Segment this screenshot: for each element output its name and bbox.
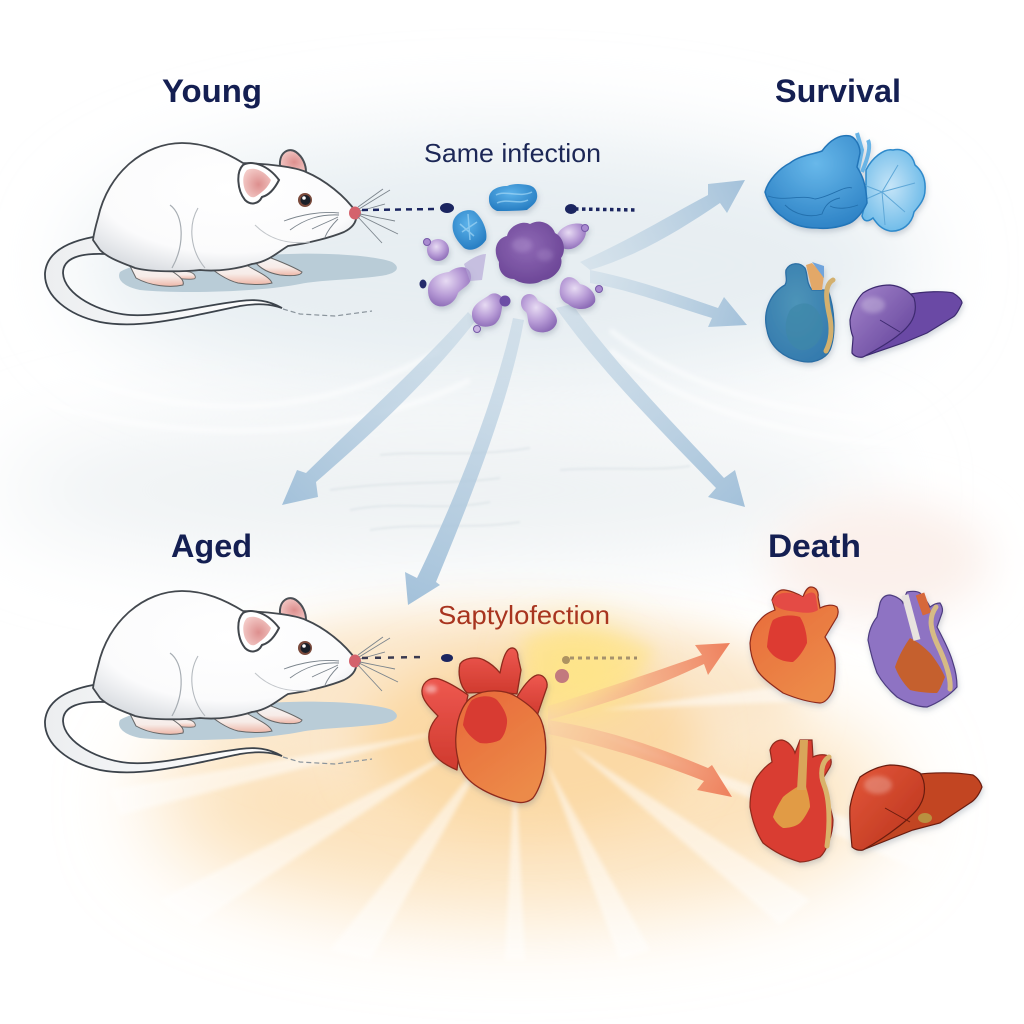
organ: red liver [850,765,982,850]
vessels [857,133,869,172]
organ: red heart upper [750,587,838,703]
purple pathogen: left small [424,238,449,261]
title: Survival: Survival [775,73,901,109]
label: Same infection: Same infection [424,138,601,168]
title: Death: Death [768,528,861,564]
dot: aged left [441,654,453,662]
blue pathogen: oval [489,184,537,211]
main body [765,136,867,228]
organ: red heart lower [750,740,833,862]
heart: left lobe [422,678,468,770]
heart: right vessel [517,675,547,716]
pathogen cluster [420,184,602,332]
dot: young right [565,204,577,214]
title: Young: Young [162,73,262,109]
purple pathogen: lower middle [472,293,510,332]
dotted path: young left [362,209,438,210]
heart: ventricle [456,691,546,803]
dotted path: young right [575,209,638,210]
organ: purple liver [850,285,962,357]
dark dot [420,280,426,288]
arrow: to aged mouse [282,312,476,505]
translucent pathogen fragment [464,254,486,281]
vessels [806,263,824,290]
arrow: to death heart upper [548,643,730,720]
heart: red patch [463,696,507,743]
arrow: to death organs lower [548,720,732,797]
aged central heart [422,648,547,803]
purple pathogen: lower left large [428,267,471,306]
dotted path: aged right [570,656,637,660]
purple pathogen: lower centre [521,294,557,332]
inflammation bubble [555,669,569,683]
label: Saptylofection: Saptylofection [438,600,610,630]
title: Aged: Aged [171,528,252,564]
dot: young left [440,203,454,213]
purple pathogen: lower right [560,277,602,309]
arrow: to staphylococcal infection [405,318,524,605]
organ: blue heart [766,262,834,362]
young mouse [45,143,398,324]
dot: aged right [562,656,570,664]
blue pathogen: round [453,210,486,250]
heart: top vessels [459,648,521,694]
purple pathogen: central large [496,222,564,284]
purple pathogen: upper right [556,223,588,249]
arrow: to survival spleen [580,180,745,270]
aged mouse [45,591,398,772]
dotted path: aged left [362,657,425,658]
lobed organ [862,150,925,231]
arrow: to death [556,304,745,507]
arrow: to survival heart and liver [590,270,747,327]
organ: purple heart [868,591,957,707]
glow behind aged heart [525,631,655,715]
organ: blue spleen and lobes [765,133,925,231]
heart: highlights [425,685,437,693]
